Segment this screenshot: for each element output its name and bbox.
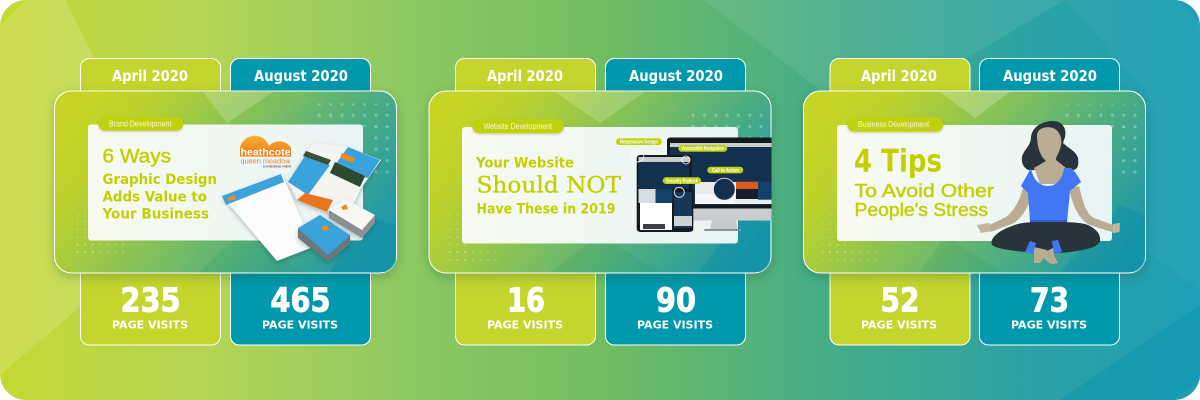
headline: Adds Value to bbox=[102, 190, 207, 206]
tab: August 2020: August 2020 bbox=[1003, 67, 1097, 85]
headline bbox=[475, 156, 621, 218]
tab: April 2020: April 2020 bbox=[487, 67, 563, 85]
stat: August page visits 73: PAGE VISITS bbox=[1011, 320, 1087, 332]
category pill bbox=[472, 119, 564, 133]
group 2: website development bbox=[429, 58, 778, 345]
logo: heathcote queen meadow: heathcote bbox=[240, 146, 291, 158]
stat: April page visits 52: 52 bbox=[880, 280, 920, 320]
category pill bbox=[847, 117, 943, 132]
callout: Accessible Navigation bbox=[678, 145, 727, 152]
logo: heathcote queen meadow: queen meadow bbox=[240, 156, 291, 166]
tab: April 2020 bbox=[80, 58, 220, 108]
stat: April page visits 16: PAGE VISITS bbox=[487, 320, 563, 332]
face and neck bbox=[1034, 127, 1066, 184]
headline: To Avoid Other bbox=[854, 181, 994, 201]
device mockup bbox=[616, 138, 778, 232]
panel: business development bbox=[804, 91, 1146, 273]
category pill: Website Development bbox=[484, 122, 553, 131]
headline: 4 Tips bbox=[854, 144, 942, 180]
headline: Have These in 2019 bbox=[476, 202, 616, 218]
white card bbox=[88, 124, 363, 240]
panel: website development bbox=[429, 91, 778, 273]
tab: April 2020: April 2020 bbox=[861, 67, 937, 85]
category pill: Business Development bbox=[858, 120, 930, 129]
stat: August page visits 465: 465 bbox=[270, 280, 330, 320]
stat: April page visits 52 bbox=[830, 255, 970, 345]
cuffs bbox=[1025, 240, 1062, 254]
headline: People's Stress bbox=[854, 200, 988, 220]
tablet bbox=[637, 155, 692, 232]
headline bbox=[102, 147, 217, 223]
callout: Security Padlock: Security Padlock bbox=[666, 178, 698, 184]
stat: April page visits 235 bbox=[80, 255, 220, 345]
stat: August page visits 90: PAGE VISITS bbox=[637, 320, 713, 332]
white business cards bbox=[329, 199, 375, 238]
hair bbox=[1022, 121, 1078, 170]
letterhead bbox=[222, 174, 313, 261]
stat: August page visits 465: PAGE VISITS bbox=[262, 320, 338, 332]
brochure bbox=[288, 143, 381, 212]
white card bbox=[462, 127, 738, 244]
tab: August 2020 bbox=[606, 58, 746, 108]
tab: April 2020 bbox=[456, 58, 596, 108]
stat: April page visits 235: 235 bbox=[120, 280, 180, 320]
headline: Should NOT bbox=[476, 173, 621, 199]
stat: August page visits 73 bbox=[980, 255, 1120, 345]
shirt bbox=[1021, 168, 1081, 222]
hands bbox=[977, 223, 1120, 233]
group 3: business development bbox=[804, 58, 1146, 345]
white card bbox=[837, 125, 1112, 241]
headline bbox=[854, 144, 994, 220]
phone bbox=[673, 189, 693, 232]
blue business cards bbox=[298, 215, 350, 262]
tab: August 2020 bbox=[980, 58, 1120, 108]
stat: April page visits 16 bbox=[456, 255, 596, 345]
stat: April page visits 52: PAGE VISITS bbox=[861, 320, 937, 332]
panel: brand development bbox=[54, 91, 396, 273]
category pill: Brand Development bbox=[109, 120, 172, 128]
group 1: brand development bbox=[54, 58, 396, 345]
callout: Responsive Design: Responsive Design bbox=[620, 139, 658, 145]
crossed legs bbox=[992, 222, 1100, 253]
logo: heathcote queen meadow bbox=[240, 136, 292, 168]
tab: April 2020: April 2020 bbox=[112, 67, 188, 85]
tab: August 2020: August 2020 bbox=[629, 67, 723, 85]
stat: April page visits 235: PAGE VISITS bbox=[112, 320, 188, 332]
headline: 6 Ways bbox=[102, 147, 171, 168]
headline: Graphic Design bbox=[102, 172, 217, 188]
stat: August page visits 90 bbox=[606, 255, 746, 345]
stat: August page visits 73: 73 bbox=[1030, 280, 1069, 320]
tab: August 2020 bbox=[230, 58, 370, 108]
callout: Accessible Navigation: Accessible Navigation bbox=[682, 146, 724, 152]
callout: Call to Action: Call to Action bbox=[712, 168, 739, 174]
stat: August page visits 465 bbox=[230, 255, 370, 345]
highlight circles bbox=[632, 150, 735, 200]
stationery mockup bbox=[222, 143, 381, 262]
headline: Your Website bbox=[475, 156, 574, 172]
tab: April 2020 bbox=[830, 58, 970, 108]
tab: August 2020: August 2020 bbox=[254, 67, 348, 85]
monitor bbox=[667, 138, 778, 231]
category pill bbox=[98, 117, 183, 131]
arms bbox=[987, 186, 1116, 233]
belt bbox=[1030, 220, 1067, 225]
callout: Security Padlock bbox=[663, 177, 701, 184]
stat: August page visits 90: 90 bbox=[656, 280, 696, 320]
logo: heathcote queen meadow: GARDENS PIER bbox=[263, 164, 292, 168]
stat: April page visits 16: 16 bbox=[507, 280, 545, 320]
feet bbox=[1034, 247, 1058, 264]
headline: Your Business bbox=[102, 207, 209, 223]
illustration: meditating woman bbox=[977, 121, 1120, 264]
